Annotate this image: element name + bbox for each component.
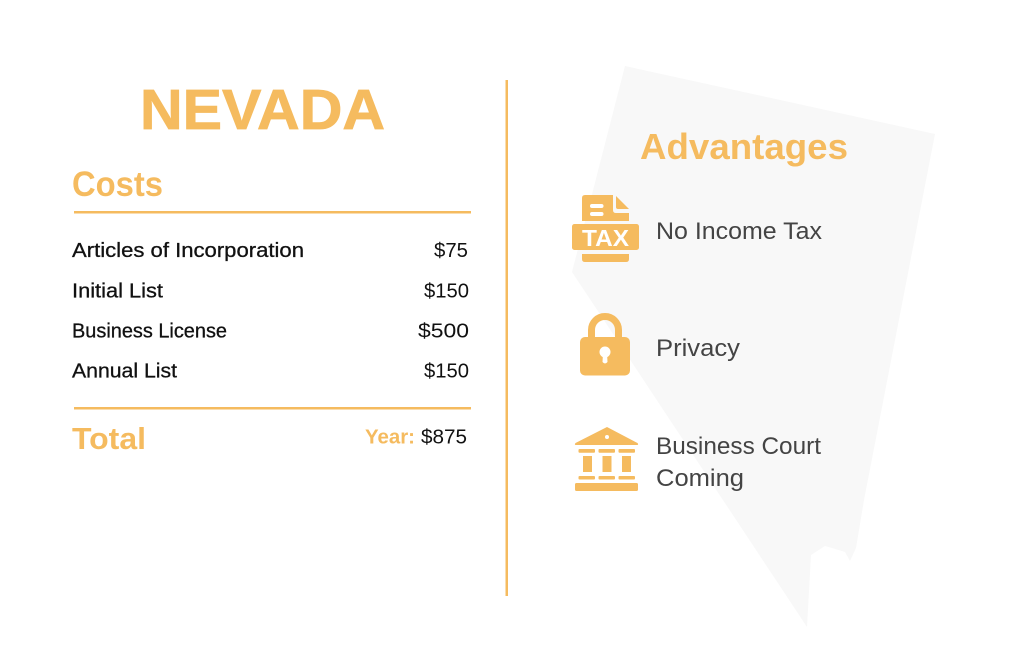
panel: costs	[72, 165, 471, 456]
heading: advantages: Advantages	[640, 126, 848, 167]
cost row: initial list	[72, 280, 469, 302]
heading: costs: Costs	[72, 165, 163, 204]
label: no income tax: No Income Tax	[656, 218, 822, 245]
label: business court coming: Business Court	[656, 433, 821, 460]
cost row: annual list	[72, 360, 469, 382]
cost row: business license: $500	[418, 320, 469, 342]
panel: advantages	[572, 126, 848, 492]
cost row: business license: Business License	[72, 320, 227, 342]
icon: courthouse	[575, 427, 638, 491]
total value: Year:	[365, 426, 415, 448]
icon: tax document: TAX	[582, 225, 630, 251]
total value	[365, 426, 467, 448]
icon: tax document	[572, 195, 639, 262]
cost row: articles of incorporation: Articles of Incorporation	[72, 240, 304, 262]
cost row: articles of incorporation: $75	[434, 240, 468, 262]
title: NEVADA	[140, 78, 385, 142]
Nevada state silhouette	[572, 66, 935, 627]
total label: Total	[72, 421, 146, 456]
label: privacy: Privacy	[656, 335, 740, 362]
cost row: annual list: Annual List	[72, 360, 177, 382]
cost row: annual list: $150	[424, 360, 469, 382]
label: business court coming	[656, 433, 821, 492]
cost row: business license	[72, 320, 469, 342]
label: business court coming: Coming	[656, 465, 744, 492]
icon: padlock	[580, 316, 630, 376]
cost row: initial list: Initial List	[72, 280, 163, 302]
total value: $875	[421, 426, 467, 448]
cost row: articles of incorporation	[72, 240, 468, 262]
vertical divider	[506, 80, 508, 596]
cost row: initial list: $150	[424, 280, 469, 302]
